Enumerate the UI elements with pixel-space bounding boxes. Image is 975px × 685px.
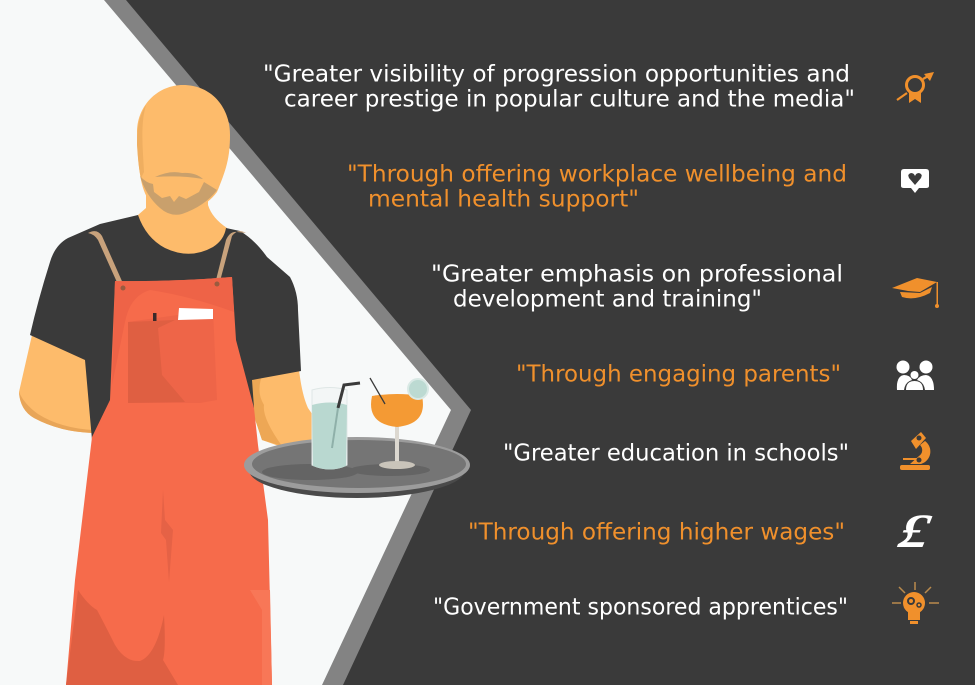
tray <box>244 437 470 498</box>
pocket <box>128 310 217 403</box>
text: quotes: "Greater emphasis on professional <box>431 262 843 288</box>
text: quotes: "Through engaging parents" <box>516 362 841 388</box>
glass with straw <box>312 383 360 470</box>
icon: people group <box>896 360 934 390</box>
text: quotes: career prestige in popular culture and the media" <box>284 86 855 112</box>
text: quotes: "Greater education in schools" <box>503 440 849 466</box>
text: quotes: "Through offering workplace wellbeing and <box>347 162 847 188</box>
text: quotes: "Through offering higher wages" <box>468 520 845 546</box>
icon: pound sign: £ <box>894 504 935 558</box>
head <box>137 85 230 215</box>
icon: microscope <box>900 432 930 470</box>
left arm <box>19 335 100 433</box>
t-shirt <box>30 215 301 440</box>
neck <box>135 190 228 258</box>
text: quotes: "Government sponsored apprentices" <box>433 594 848 620</box>
apron <box>66 277 272 685</box>
icon: graduation cap <box>892 278 939 308</box>
straps <box>88 231 246 289</box>
beard <box>140 176 217 215</box>
icon: award with arrow <box>897 72 934 103</box>
text: quotes: development and training" <box>453 286 762 312</box>
card in pocket <box>178 308 213 320</box>
text: quotes <box>263 62 855 620</box>
cocktail glass <box>370 378 428 469</box>
icon: heart speech bubble <box>901 169 929 193</box>
right arm <box>250 370 327 450</box>
text: quotes: mental health support" <box>368 186 639 212</box>
text: quotes: "Greater visibility of progression opportunities and <box>263 62 850 88</box>
icon: light bulb with gears <box>892 582 939 624</box>
pen <box>153 313 156 321</box>
illustration: waiter with tray <box>19 85 470 685</box>
